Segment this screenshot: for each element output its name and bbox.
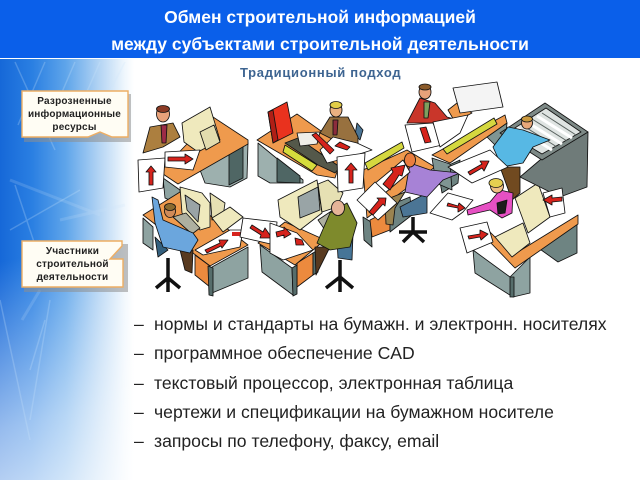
monitor [180,187,210,230]
desk: bottom right [473,183,578,297]
bullet list [134,314,607,451]
document [165,150,200,170]
callout: scattered information resources: Разрозненные [37,96,112,106]
header [0,0,640,58]
list item: – [134,373,144,393]
document chain left [195,230,243,255]
document [138,158,165,192]
person: blond man [320,102,363,153]
document [240,218,277,245]
document [433,115,468,147]
book binder [268,102,293,143]
document [337,153,365,192]
callout: construction participants [21,240,128,292]
callout: scattered information resources [21,90,131,142]
person: brown jacket left [143,106,180,153]
person: blue shirt standing [493,116,550,200]
monitor [182,107,220,152]
desk: top middle [257,114,345,183]
document [448,150,508,183]
decorative background band [0,59,140,480]
list item: нормы и стандарты на бумажн. и электронн. носителях [154,314,607,334]
list item: программное обеспечение CAD [154,343,415,363]
document [430,193,473,220]
document [357,182,397,220]
desk: middle right with label [363,142,460,247]
desk: bottom left [143,187,248,296]
document [367,160,410,193]
title [111,7,529,54]
subtitle: Традиционный подход [240,65,401,80]
people [143,84,550,292]
person: red jacket [407,84,458,123]
document [312,133,372,163]
desk: top left [160,107,248,205]
desk: bottom middle [258,180,343,296]
document [543,188,565,217]
person: purple shirt [385,153,460,242]
person: light blue shirt seated [152,197,198,292]
desk: top right with label [432,103,507,190]
title: Обмен строительной информацией [164,7,476,27]
list item: чертежи и спецификации на бумажном носителе [154,402,554,422]
callout: construction participants: строительной [36,259,109,270]
list item: – [134,402,144,422]
list item: – [134,343,144,363]
callout: scattered information resources: информационные [28,108,121,120]
list item: – [134,314,144,334]
documents with red arrows [138,115,565,260]
archive cabinet [500,103,588,197]
document [460,222,493,253]
list item: текстовый процессор, электронная таблица [154,373,513,393]
list item: запросы по телефону, факсу, email [154,431,439,451]
callout: construction participants: Участники [46,246,99,257]
person: pink jacket woman [467,178,513,218]
title: между субъектами строительной деятельности [111,34,529,54]
document [270,223,313,260]
callout: construction participants: деятельности [37,272,108,283]
document [405,123,442,152]
callout: scattered information resources: ресурсы [52,122,97,132]
list item: – [134,431,144,451]
monitor [278,180,322,230]
person: olive jacket [315,200,357,292]
paper stack top right [453,82,503,113]
